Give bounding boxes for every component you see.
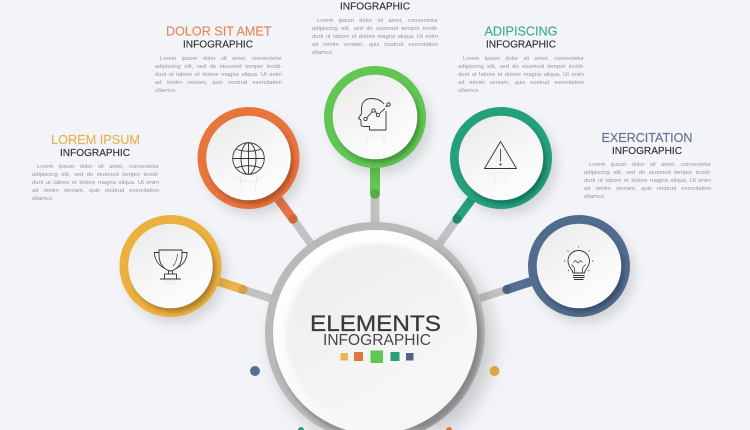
connector: green bbox=[370, 160, 380, 230]
subheading: INFOGRAPHIC bbox=[340, 2, 410, 12]
node: blue bulb bbox=[528, 215, 634, 323]
body text bbox=[312, 16, 438, 58]
body text bbox=[458, 54, 584, 96]
central circle bbox=[265, 222, 500, 430]
body text bbox=[155, 54, 282, 96]
heading: exercitation: EXERCITATION bbox=[602, 131, 692, 145]
body text: ullamco. bbox=[458, 88, 480, 94]
central title: ELEMENTS bbox=[310, 311, 441, 336]
subheading: INFOGRAPHIC bbox=[60, 148, 130, 159]
connector: blue bbox=[470, 277, 545, 302]
body text: dunt ut labore et dolore magna aliqua. Ut enim bbox=[312, 34, 438, 40]
body text bbox=[32, 163, 159, 205]
body text: Lorem ipsum dolor sit amet, consectetur bbox=[37, 164, 159, 170]
body text: dunt ut labore et dolore magna aliqua. Ut enim bbox=[155, 72, 282, 78]
body text: ad minim veniam, quis nostrud exercitation bbox=[32, 188, 159, 194]
icon: globe bbox=[233, 143, 264, 190]
node: teal warning bbox=[450, 107, 556, 215]
text block: exercitation bbox=[584, 131, 711, 203]
body text: ad minim veniam, quis nostrud exercitation bbox=[312, 42, 438, 48]
subheading: INFOGRAPHIC bbox=[612, 146, 682, 157]
body text: adipiscing elit, sed do eiusmod tempor incidi- bbox=[458, 64, 584, 70]
text block: top centre bbox=[312, 2, 438, 58]
subheading: INFOGRAPHIC bbox=[183, 40, 253, 50]
icon: trophy bbox=[154, 250, 187, 284]
icon: head with chart bbox=[358, 98, 390, 146]
decorative dot: orange bottom bbox=[446, 427, 452, 430]
body text: adipiscing elit, sed do eiusmod tempor incidi- bbox=[584, 170, 711, 176]
heading: adipiscing: ADIPISCING bbox=[484, 24, 558, 38]
connector: teal bbox=[434, 188, 480, 251]
connector: yellow bbox=[205, 277, 280, 302]
body text bbox=[584, 161, 711, 203]
icon: warning triangle bbox=[484, 142, 516, 185]
icon: light bulb bbox=[564, 246, 594, 280]
colour squares bbox=[340, 350, 414, 363]
body text: adipiscing elit, sed do eiusmod tempor incidi- bbox=[155, 64, 282, 70]
body text: ullamco. bbox=[584, 194, 606, 200]
body text: ullamco. bbox=[155, 88, 177, 94]
heading: dolor sit amet: DOLOR SIT AMET bbox=[166, 24, 272, 38]
body text: Lorem ipsum dolor sit amet, consectetur bbox=[463, 56, 584, 62]
body text: ullamco. bbox=[32, 196, 54, 202]
decorative dot: blue bbox=[250, 366, 260, 376]
decorative dot: teal bottom bbox=[298, 427, 304, 430]
decorative dot: yellow bbox=[490, 366, 500, 376]
body text: Lorem ipsum dolor sit amet, consectetur bbox=[317, 18, 438, 24]
body text: ad minim veniam, quis nostrud exercitation bbox=[458, 80, 584, 86]
text block: adipiscing bbox=[458, 24, 584, 96]
heading: lorem ipsum: LOREM IPSUM bbox=[51, 133, 140, 147]
node: yellow trophy bbox=[120, 215, 226, 323]
connector: orange bbox=[270, 188, 316, 251]
body text: dunt ut labore et dolore magna aliqua. Ut enim bbox=[32, 180, 159, 186]
body text: adipiscing elit, sed do eiusmod tempor incidi- bbox=[312, 26, 438, 32]
body text: ullamco. bbox=[312, 50, 334, 56]
central subtitle: INFOGRAPHIC bbox=[323, 332, 431, 349]
node: green head bbox=[324, 66, 430, 174]
subheading: INFOGRAPHIC bbox=[486, 40, 556, 50]
body text: adipiscing elit, sed do eiusmod tempor incidi- bbox=[32, 172, 159, 178]
body text: ad minim veniam, quis nostrud exercitation bbox=[155, 80, 282, 86]
text block: dolor sit amet bbox=[155, 24, 282, 96]
body text: Lorem ipsum dolor sit amet, consectetur bbox=[589, 162, 711, 168]
body text: dunt ut labore et dolore magna aliqua. Ut enim bbox=[584, 178, 711, 184]
body text: dunt ut labore et dolore magna aliqua. Ut enim bbox=[458, 72, 584, 78]
node: orange globe bbox=[198, 107, 304, 215]
text block: lorem ipsum bbox=[32, 133, 159, 205]
body text: ad minim veniam, quis nostrud exercitation bbox=[584, 186, 711, 192]
body text: Lorem ipsum dolor sit amet, consectetur bbox=[160, 56, 282, 62]
